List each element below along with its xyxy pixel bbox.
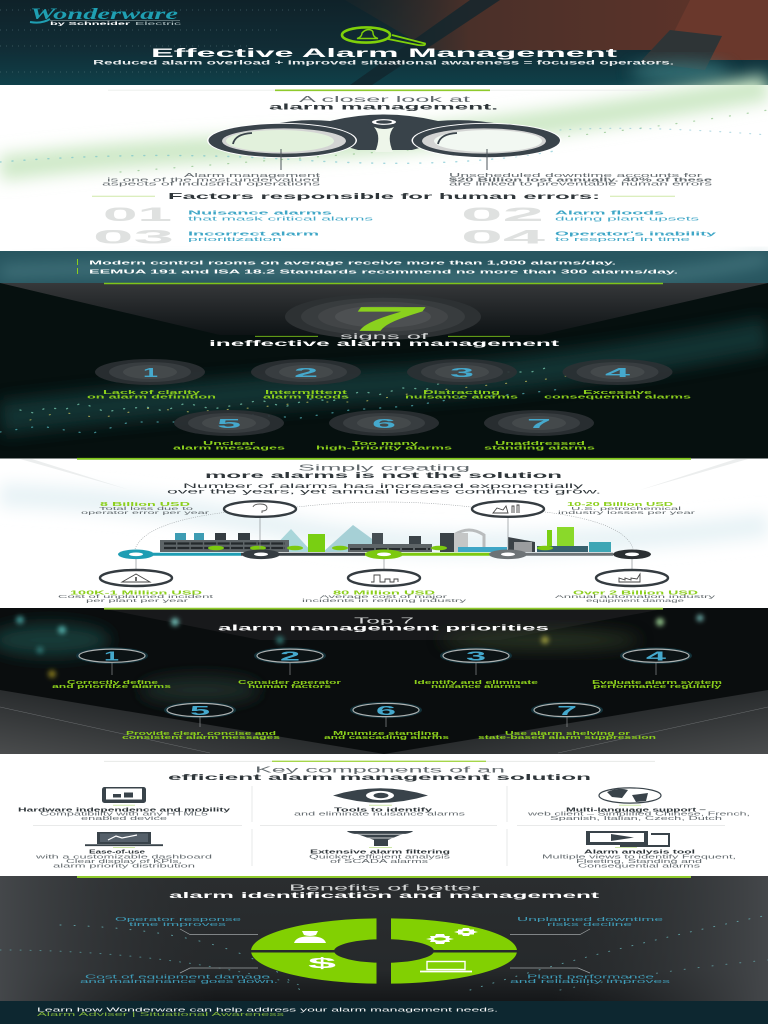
- heading: Top 7: [354, 615, 415, 625]
- sign 1: [87, 359, 216, 401]
- logo: Wonderware by Schneider Electric: by Schneider: [50, 21, 131, 26]
- heading: Number of alarms has increased exponentially: [183, 483, 586, 490]
- icon: operator: [294, 931, 326, 943]
- benefit: cost of equipment damage: and maintenance goes down.: [80, 979, 279, 985]
- component: alarm filtering: of SCADA alarms: [330, 859, 429, 865]
- factor 03: Incorrect alarm: [188, 231, 319, 237]
- text: downtime note: [449, 173, 714, 188]
- priority 7: state-based alarm suppression: [478, 735, 656, 741]
- chart: four-segment ring: [251, 918, 517, 984]
- sign 5: alarm messages: [173, 446, 286, 452]
- priority 4: 4: [646, 648, 668, 664]
- panel: teal statistics band: Modern control rooms on average receive more than 1,000 alarms/day.: [89, 260, 617, 266]
- sign 2: [251, 359, 361, 401]
- factor 02: during plant upsets: [555, 216, 699, 222]
- factor 01: Nuisance alarms: [188, 210, 334, 216]
- stat: over 2 billion: Annual automation industry: [555, 594, 717, 599]
- factor 03: [93, 228, 319, 248]
- text: alarm management note: is one of the most undervalued: [107, 177, 321, 183]
- benefit: operator response: Operator response: [115, 917, 243, 923]
- leader lines: [180, 929, 590, 973]
- text: alarm management note: Alarm management: [184, 173, 322, 179]
- component: multi-language support: web client – Simplified Chinese, French,: [528, 812, 750, 818]
- priority 6: and cascading alarms: [324, 735, 450, 741]
- logo: Wonderware by Schneider Electric: Electric: [135, 21, 183, 26]
- priority 1: 1: [104, 648, 119, 664]
- priority 2: Consider operator: [238, 680, 341, 686]
- icon: alarm bell in magnifier: [342, 27, 425, 45]
- heading: A closer look at: [299, 94, 472, 104]
- sign 3: [405, 359, 519, 401]
- pipeline with nodes: [118, 517, 651, 570]
- sign 6: Too many: [352, 441, 419, 447]
- sign 1: Lack of clarity: [103, 390, 201, 396]
- factor 02: Alarm floods: [555, 210, 666, 216]
- factor 01: that mask critical alarms: [188, 216, 373, 222]
- heading: more alarms is not the solution: [205, 470, 562, 480]
- component: multi-language support: [528, 788, 750, 822]
- stat: 100K-1 million: per plant per year: [86, 598, 189, 603]
- stat: 8 billion: 8 Billion USD: [100, 502, 191, 508]
- heading: Benefits of better: [289, 882, 480, 892]
- sign 2: 2: [294, 365, 318, 380]
- icon: refinery ring: [348, 570, 420, 586]
- priority 5: consistent alarm messages: [122, 735, 281, 741]
- benefit: operator response: time improves: [129, 922, 226, 928]
- stat: 8 billion: [81, 502, 210, 515]
- stat: 10-20 billion: 10-20 Billion USD: [567, 502, 674, 508]
- benefit: cost of equipment damage: Cost of equipment damage: [85, 974, 272, 980]
- icon: dollar: $: [308, 955, 338, 972]
- component: ease of use: Clear display of KPIs,: [66, 859, 182, 865]
- stat: 100K-1 million: 100K-1 Million USD: [70, 590, 203, 596]
- panel: teal statistics band: [0, 251, 768, 283]
- panel: footer: [0, 1001, 768, 1024]
- component: alarm analysis tool: Alarm analysis tool: [584, 849, 696, 855]
- benefit: operator response: [115, 917, 243, 928]
- title: Effective Alarm Management: [151, 48, 617, 60]
- sign 4: [544, 359, 692, 401]
- stat: over 2 billion: equipment damage: [586, 598, 685, 603]
- priority 2: human factors: [248, 684, 332, 690]
- heading: alarm management.: [269, 102, 498, 112]
- panel: top 7 priorities: [0, 608, 768, 754]
- priority 5: [122, 702, 281, 741]
- component: alarm analysis tool: Consequential alarms: [578, 863, 701, 869]
- sign 2: Intermittent: [265, 390, 348, 396]
- stat: 80 million: 80 Million USD: [333, 590, 436, 596]
- sign 3: 3: [450, 365, 474, 380]
- factor 02: 02: [461, 205, 544, 226]
- sign 7: standing alarms: [484, 446, 596, 452]
- component: tools to identify: and eliminate nuisance alarms: [294, 812, 466, 818]
- sign 2: alarm floods: [263, 395, 350, 401]
- panel: 7 signs: [0, 283, 768, 458]
- component: tools to identify: [294, 788, 466, 818]
- priority 2: [238, 647, 341, 690]
- priority 4: Evaluate alarm system: [592, 680, 723, 686]
- component: tools to identify: Tools to identify: [334, 808, 433, 814]
- heading: [167, 462, 602, 496]
- sign 3: Distracting: [423, 390, 500, 396]
- stat: 80 million: Average cost of major: [320, 594, 448, 599]
- priority 7: Use alarm shelving or: [505, 731, 630, 737]
- component: multi-language support: Spanish, Italian, Czech, Dutch: [550, 816, 723, 822]
- factor 04: Operator's inability: [555, 231, 718, 237]
- benefit: unplanned downtime: Unplanned downtime: [517, 917, 665, 923]
- component: hardware independence: [18, 787, 230, 822]
- sign 7: Unaddressed: [495, 441, 585, 447]
- component: alarm filtering: [309, 831, 451, 865]
- logo: Wonderware by Schneider Electric: [30, 6, 183, 26]
- heading: alarm management priorities: [218, 622, 550, 632]
- factor 03: 03: [93, 228, 174, 248]
- factor 01: [103, 205, 373, 226]
- priority 1: Correctly define: [67, 680, 158, 686]
- benefit: unplanned downtime: risks decline: [547, 922, 634, 928]
- priority 3: 3: [466, 648, 486, 664]
- connector arcs: [135, 502, 633, 549]
- panel: more alarms is not the solution: [0, 459, 768, 608]
- icon: binoculars: [207, 114, 562, 170]
- component: ease of use: [36, 832, 213, 869]
- factor 02: [461, 205, 699, 226]
- priority 3: nuisance alarms: [431, 684, 522, 690]
- footer links: Alarm Adviser | Situational Awareness: [37, 1012, 285, 1018]
- benefit: plant performance: [510, 974, 670, 985]
- illustration: industrial skyline: [160, 525, 611, 552]
- heading: alarm identification and management: [169, 890, 599, 900]
- heading: ineffective alarm management: [209, 338, 559, 348]
- stat: 10-20 billion: [558, 502, 696, 515]
- heading: [169, 882, 599, 900]
- sign 1: on alarm definition: [87, 395, 216, 401]
- component: ease of use: with a customizable dashboard: [36, 854, 213, 860]
- component: ease of use: Ease-of-use: [89, 849, 145, 855]
- factor 04: 04: [461, 228, 547, 248]
- priority 4: [592, 647, 723, 690]
- sign 1: 1: [143, 365, 158, 380]
- stat: 80 million: [302, 590, 468, 603]
- priority 6: Minimize standing: [333, 731, 439, 737]
- sign 7: 7: [527, 416, 551, 431]
- stat: 100K-1 million: [58, 590, 215, 603]
- component: alarm analysis tool: Multiple views to identify Frequent,: [542, 854, 736, 860]
- heading: efficient alarm management solution: [168, 772, 591, 782]
- icon: factory ring: [596, 570, 668, 586]
- priority 7: [478, 702, 656, 741]
- priority 5: Provide clear, concise and: [126, 731, 276, 737]
- icon: laptop: [420, 962, 472, 972]
- heading: [209, 332, 559, 348]
- text: downtime note: $20 Billion lost annually. 40% of these: [449, 177, 713, 183]
- icon: gears: [426, 928, 478, 944]
- panel: teal statistics band: EEMUA 191 and ISA 18.2 Standards recommend no more than 300 alarms/day.: [89, 270, 679, 276]
- priority 6: [324, 702, 450, 741]
- heading: [269, 94, 498, 112]
- icon: petrochemical ring: [472, 501, 544, 517]
- heading: over the years, yet annual losses continue to grow.: [167, 488, 602, 496]
- panel: key components: [0, 754, 768, 876]
- priority 3: Identify and eliminate: [414, 680, 539, 686]
- call to action: Learn how Wonderware can help address your alarm management needs.: [37, 1008, 499, 1014]
- priority 1: and prioritize alarms: [52, 684, 172, 690]
- priority 5: 5: [190, 703, 210, 718]
- component: hardware independence: Compatibility with any HTML5: [40, 812, 209, 818]
- priority 2: 2: [280, 648, 300, 664]
- benefit: cost of equipment damage: [80, 974, 279, 985]
- sign 3: nuisance alarms: [405, 395, 519, 401]
- bokeh lights: [16, 614, 704, 678]
- sign 4: Excessive: [583, 390, 653, 396]
- heading: [218, 615, 550, 632]
- benefit: unplanned downtime: [517, 917, 665, 928]
- factor 03: prioritization: [188, 237, 282, 243]
- text: downtime note: are linked to preventable human errors: [449, 182, 714, 188]
- priority 6: 6: [376, 703, 396, 718]
- component: hardware independence: enabled device: [81, 816, 168, 822]
- panel: benefits: [0, 876, 768, 1001]
- stat: over 2 billion: Over 2 Billion USD: [573, 590, 699, 596]
- priority 7: 7: [557, 703, 577, 718]
- stat: 8 billion: Total loss due to: [99, 506, 194, 511]
- logo: Wonderware by Schneider Electric: Wonderware: [30, 6, 178, 23]
- sign 5: [173, 410, 286, 452]
- priority 1: [52, 647, 172, 690]
- panel: header: [0, 0, 768, 85]
- factor 04: [461, 228, 718, 248]
- priority 3: [414, 647, 539, 690]
- stat: 100K-1 million: Cost of unplanned incident: [58, 594, 215, 599]
- heading: [168, 764, 591, 782]
- text: alarm management note: aspects of industrial operations: [102, 182, 322, 188]
- component: alarm analysis tool: Fleeting, Standing and: [576, 859, 703, 865]
- heading: Key components of an: [255, 764, 506, 774]
- benefit: plant performance: Plant performance: [527, 974, 656, 980]
- text: downtime note: Unscheduled downtime accounts for: [449, 173, 703, 179]
- component: alarm analysis tool: [542, 831, 736, 869]
- factor 04: to respond in time: [555, 237, 692, 243]
- number 7 badge: 7: [351, 300, 425, 338]
- sign 6: 6: [372, 416, 396, 431]
- component: ease of use: alarm priority distribution: [53, 863, 196, 869]
- sign 6: high-priority alarms: [316, 446, 453, 452]
- subtitle: Reduced alarm overload + improved situational awareness = focused operators.: [93, 60, 675, 66]
- text: alarm management note: [102, 173, 322, 188]
- subheading: factors: Factors responsible for human errors:: [168, 192, 600, 201]
- sign 6: [316, 410, 453, 452]
- sign 4: 4: [605, 365, 633, 380]
- heading: signs of: [340, 332, 430, 341]
- icon: warning ring: [100, 570, 172, 586]
- component: alarm filtering: Quicker, efficient analysis: [309, 854, 451, 860]
- sign 7: [484, 410, 596, 452]
- stat: 10-20 billion: industry losses per year: [558, 510, 696, 515]
- stat: 8 billion: operator error per year: [81, 510, 210, 515]
- sign 5: Unclear: [203, 441, 255, 447]
- stat: over 2 billion: [555, 590, 717, 603]
- priority 4: performance regularly: [593, 684, 721, 690]
- stat: 80 million: incidents in refining industry: [302, 598, 468, 603]
- sign 5: 5: [217, 416, 241, 431]
- heading: Simply creating: [298, 462, 471, 472]
- component: hardware independence: Hardware independence and mobility: [18, 808, 230, 814]
- stat: 10-20 billion: U.S. petrochemical: [571, 506, 681, 511]
- number 7 badge: [285, 294, 481, 340]
- icon: operator head ring: [224, 501, 296, 517]
- component: alarm filtering: Extensive alarm filtering: [310, 849, 450, 855]
- factor 01: 01: [103, 205, 173, 226]
- component: multi-language support: Multi-language support –: [566, 808, 706, 814]
- benefit: plant performance: and reliability improves: [510, 979, 670, 985]
- sign 4: consequential alarms: [544, 395, 692, 401]
- panel: a closer look: [0, 85, 768, 251]
